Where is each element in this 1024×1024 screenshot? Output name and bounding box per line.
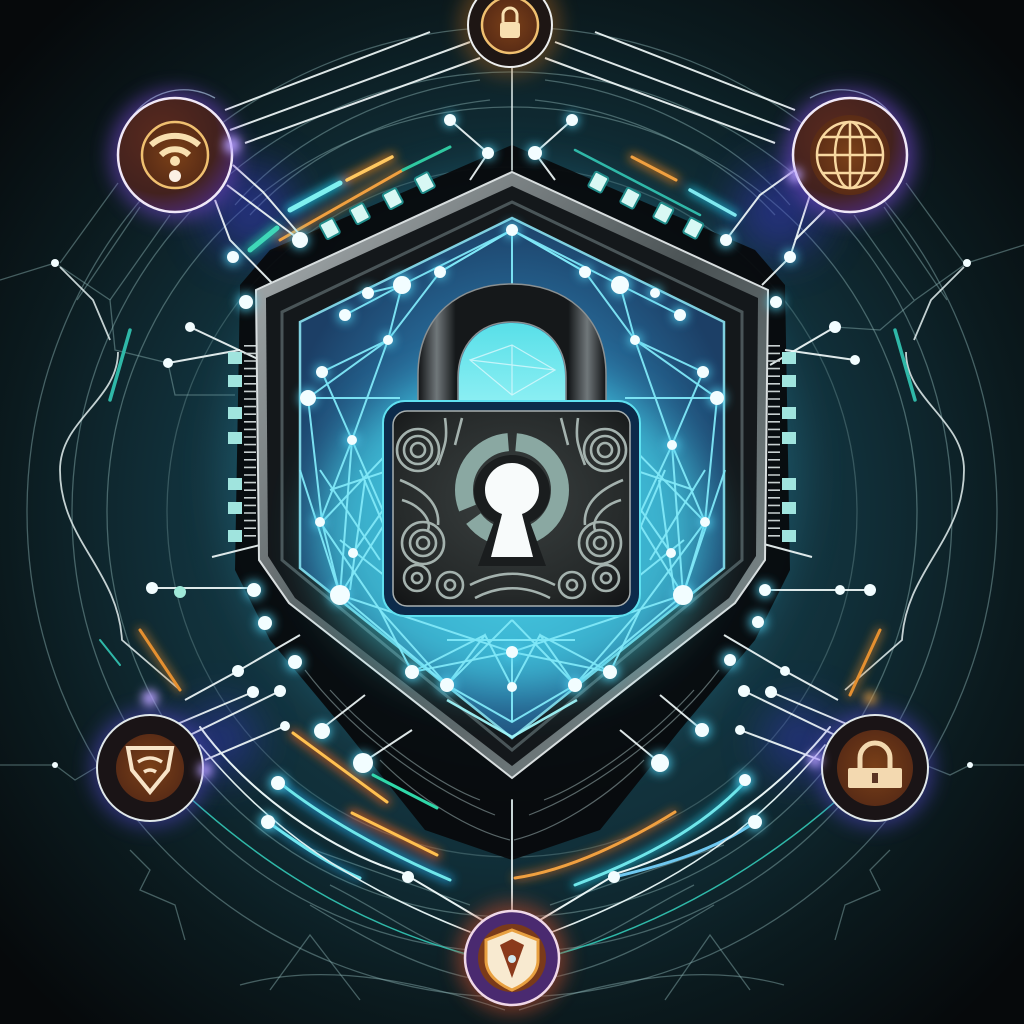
coloured light traces glow [140, 157, 880, 885]
shield screen [300, 218, 724, 738]
network nodes [51, 114, 973, 883]
icon purple haze [185, 165, 835, 775]
network mesh [300, 230, 725, 737]
shield metal frame [256, 172, 768, 778]
gill strips [250, 345, 774, 540]
padlock shackle [418, 284, 606, 410]
circuit connectors [152, 32, 870, 763]
node halos [225, 113, 797, 831]
engraved swirls [397, 418, 626, 598]
shield inner groove [282, 202, 742, 750]
icon: shield wifi [90, 708, 210, 828]
screen glow around lock [317, 370, 707, 690]
coloured light traces [100, 65, 915, 955]
teal chip pads [228, 171, 796, 542]
shield dark inner rim [266, 186, 758, 766]
shield [256, 172, 768, 778]
icon: bottom shield [456, 902, 568, 1014]
icon: wifi [109, 89, 241, 221]
keyhole [485, 463, 539, 557]
padlock glow edge [383, 401, 640, 616]
icon: globe [784, 89, 916, 221]
padlock face [393, 411, 630, 606]
padlock [383, 284, 640, 616]
padlock opening [459, 323, 565, 408]
opening mesh [470, 345, 555, 395]
central glow [222, 170, 802, 770]
keyhole medallion [464, 442, 560, 538]
icon: lock top [458, 0, 562, 77]
lens flares [142, 137, 876, 777]
thin traces on backing [305, 670, 719, 840]
keyhole bezel [474, 455, 550, 566]
large white side traces [60, 267, 964, 690]
chip backing [235, 145, 790, 860]
icon: padlock right [815, 708, 935, 828]
